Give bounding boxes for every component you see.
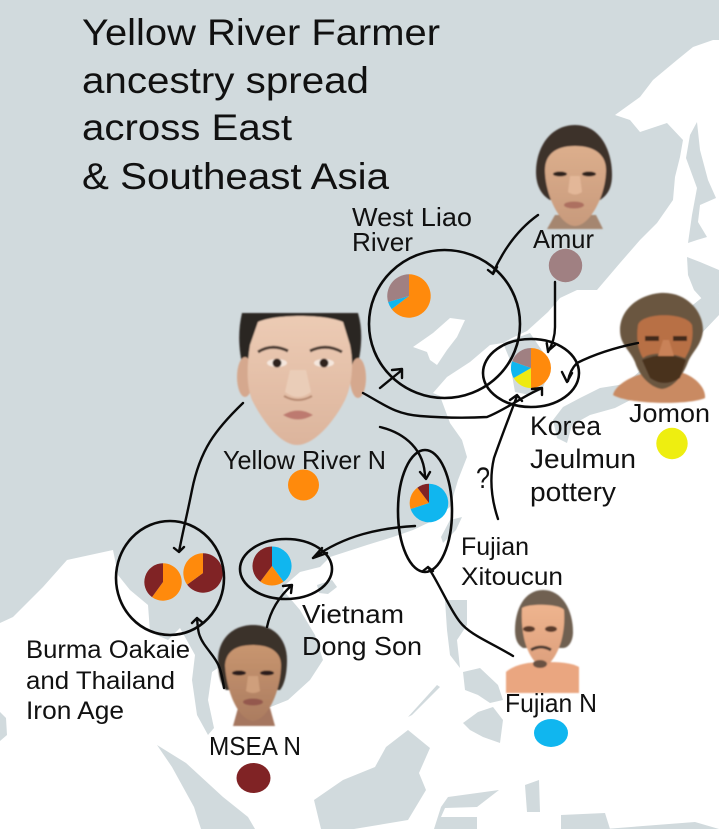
- label: Jomon: Jomon: [629, 398, 710, 428]
- label: Burma Oakaie and Thailand Iron Age: and Thailand: [26, 667, 175, 695]
- label: Burma Oakaie and Thailand Iron Age: [26, 636, 190, 725]
- label: Amur: Amur: [533, 224, 594, 254]
- label: Fujian Xitoucun: Xitoucun: [461, 563, 563, 591]
- label: Fujian N: Fujian N: [505, 688, 597, 718]
- arrows: [174, 215, 638, 688]
- pie: West Liao River: [387, 274, 431, 318]
- label: Fujian Xitoucun: Fujian: [461, 533, 529, 561]
- face: Fujian N: [506, 590, 579, 693]
- label: West Liao River: [352, 202, 472, 257]
- label: Vietnam Dong Son: [302, 599, 422, 661]
- face: MSEA N: [218, 625, 287, 726]
- label: Burma Oakaie and Thailand Iron Age: Burma Oakaie: [26, 636, 190, 664]
- label: question mark: ?: [476, 462, 490, 495]
- label: Vietnam Dong Son: Dong Son: [302, 631, 422, 661]
- face: Yellow River N: [237, 313, 366, 445]
- legend dot: Fujian N: [534, 719, 568, 747]
- pie: Burma Oakaie: [144, 563, 182, 601]
- pie: Thailand Iron Age: [183, 553, 223, 593]
- label: Vietnam Dong Son: Vietnam: [302, 599, 404, 629]
- label: Korea Jeulmun pottery: pottery: [530, 477, 617, 507]
- title: [82, 12, 440, 197]
- legend dot: MSEA N: [236, 763, 270, 793]
- label: Korea Jeulmun pottery: Korea: [530, 411, 602, 441]
- label: Burma Oakaie and Thailand Iron Age: Iron Age: [26, 697, 124, 725]
- face: Amur: [536, 125, 612, 229]
- pie: Korea Jeulmun pottery: [511, 348, 551, 388]
- face: Jomon: [613, 293, 705, 403]
- circles around populations: [116, 250, 579, 635]
- pie: Vietnam Dong Son: [253, 546, 292, 586]
- pie: Fujian Xitoucun: [410, 484, 448, 522]
- label: Korea Jeulmun pottery: Jeulmun: [530, 444, 636, 474]
- label: MSEA N: MSEA N: [209, 731, 301, 761]
- label: Fujian Xitoucun: [461, 533, 563, 591]
- label: Yellow River N: Yellow River N: [223, 445, 386, 475]
- label: West Liao River: River: [352, 227, 413, 257]
- legend dot: Amur: [549, 249, 582, 282]
- label: Korea Jeulmun pottery: [530, 411, 636, 507]
- title: Yellow River Farmer: [82, 12, 440, 53]
- title: & Southeast Asia: [82, 156, 389, 197]
- legend dot: Jomon: [656, 428, 688, 459]
- label: West Liao River: West Liao: [352, 202, 472, 232]
- legend dot: Yellow River N: [288, 470, 319, 500]
- title: ancestry spread: [82, 60, 369, 101]
- title: across East: [82, 107, 293, 148]
